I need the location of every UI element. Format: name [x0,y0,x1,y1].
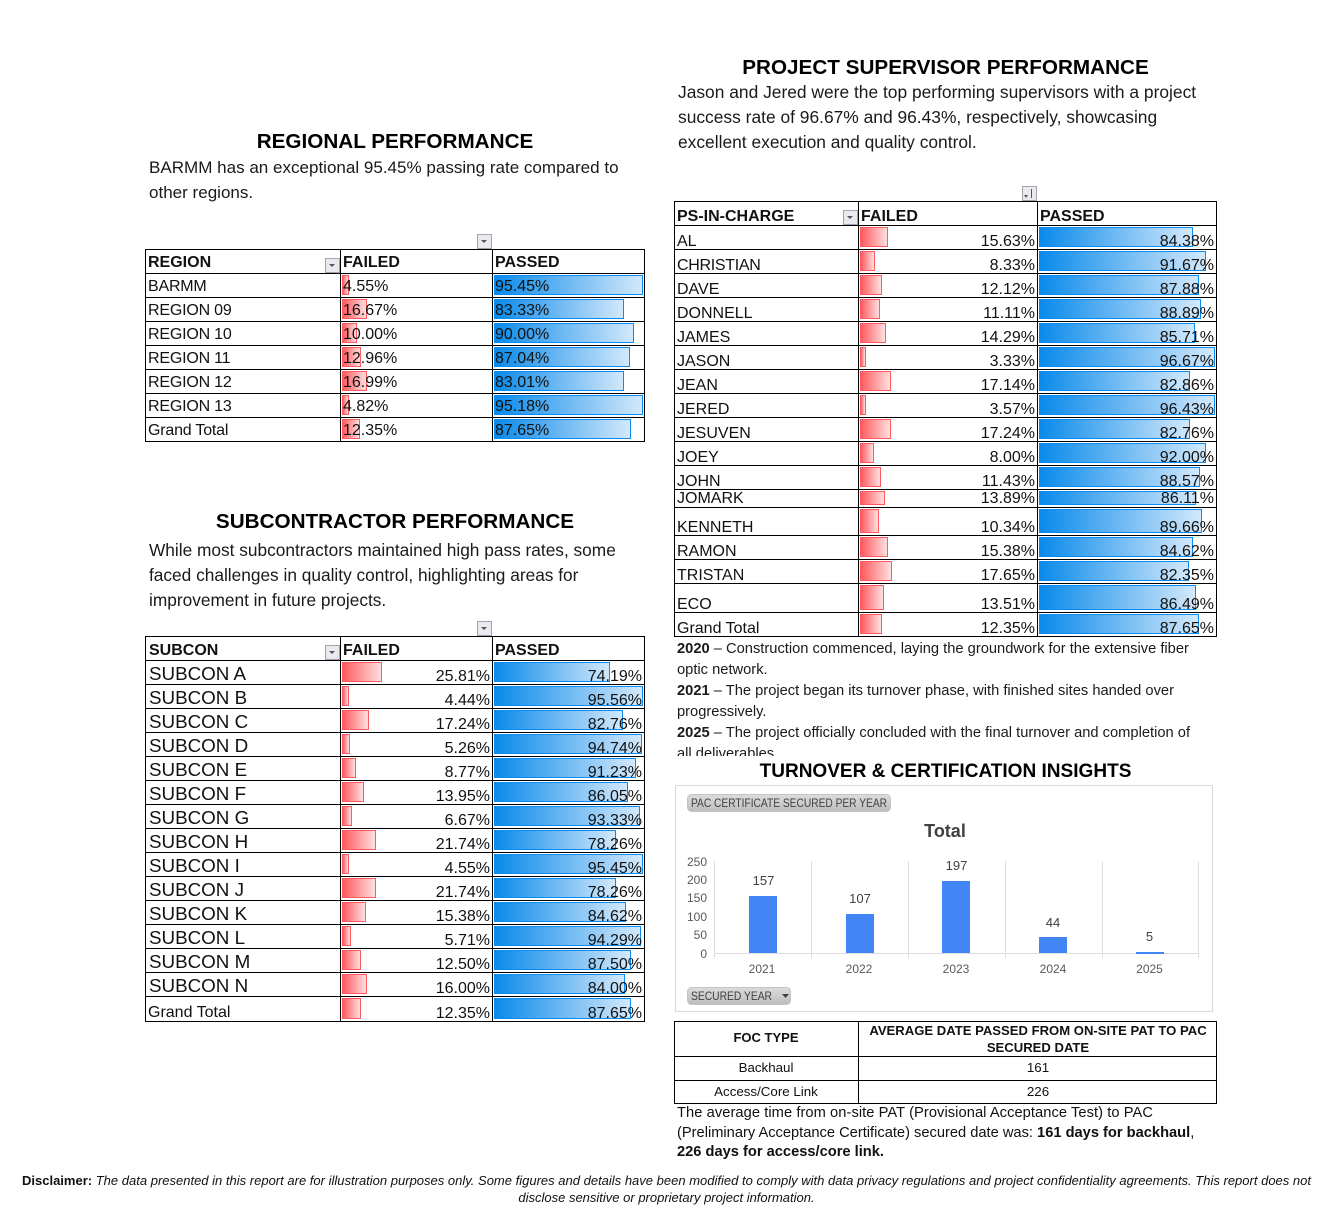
cell: access/core link: Access/Core Link [714,1084,818,1099]
row: Subcon G: SUBCON G [149,807,249,828]
text: project timeline: 2020 – Construction commenced, laying the groundwork for the extensive fiber [677,641,1189,657]
cell: backhaul value: 161 [1027,1060,1049,1075]
row: Donnell [674,297,1217,322]
table: subcontractor performance [145,636,645,1022]
row: Joey: 92.00% [1160,449,1214,466]
row: Subcon B: 4.44% [445,692,490,709]
row: Ramon: 84.62% [1160,543,1214,560]
text: subcontractor summary [149,540,616,610]
cell: backhaul: Backhaul [739,1060,793,1075]
y axis labels: 50 [694,928,707,942]
header: average date [869,1023,1207,1055]
x axis labels: 2022 [846,962,873,976]
row: Subcon E: 91.23% [588,764,642,781]
row: Region 13: 4.82% [343,398,388,415]
row: Subcon A: SUBCON A [149,663,246,684]
row: Donnell: DONNELL [677,305,753,322]
row: Jered: JERED [677,401,729,418]
row: Jesuven: 17.24% [981,425,1035,442]
row: Jered [674,393,1217,418]
row: Subcon C [145,708,645,733]
row: Subcon I: SUBCON I [149,855,240,876]
header row: REGION [148,254,211,271]
header row [145,636,645,661]
y axis labels [687,855,707,961]
text: average time note: The average time from on-site PAT (Provisional Acceptance Test) to PAC [677,1105,1153,1121]
row: Ramon [674,535,1217,560]
row: Dave [674,273,1217,298]
row: Tristan [674,559,1217,584]
row: Dave: 12.12% [981,281,1035,298]
row: Jered: 3.57% [990,401,1035,418]
row: Region 09: 83.33% [495,302,549,319]
y axis labels: 0 [700,947,707,961]
row: Subcon N: SUBCON N [149,975,248,996]
row: Region 11 [145,345,645,370]
row: Subcon D: 5.26% [445,740,490,757]
row: Subcon D [145,732,645,757]
header row: FAILED [343,642,400,659]
table: project supervisor performance [674,201,1217,637]
row: Subcon L: SUBCON L [149,927,245,948]
row: Subcon I: 95.45% [588,860,642,877]
row: Jesuven [674,417,1217,442]
row: Jason: 3.33% [990,353,1035,370]
text: supervisor summary: Jason and Jered were the top performing supervisors with a project [678,82,1196,102]
row: Jason: 96.67% [1160,353,1214,370]
row: James: 14.29% [981,329,1035,346]
row: Subcon M: 87.50% [588,956,642,973]
x axis labels: 2023 [943,962,970,976]
row: Region 11: REGION 11 [148,350,230,367]
row: Grand Total: 12.35% [436,1005,490,1022]
data labels: 44 [1046,915,1060,930]
icon: subcon filter [325,645,340,660]
header: average date: AVERAGE DATE PASSED FROM ON-SITE PAT TO PAC [869,1023,1207,1038]
row: James [674,321,1217,346]
row: Grand Total: 87.65% [1160,620,1214,637]
y axis labels: 100 [687,910,707,924]
icon: supervisor sort [1022,186,1037,201]
row: John [674,465,1217,490]
row: Grand Total: Grand Total [148,1004,230,1021]
row: Region 10: 90.00% [495,326,549,343]
data labels: 107 [849,891,871,906]
y axis labels: 250 [687,855,707,869]
row: BARMM [145,273,645,298]
row: Subcon F [145,780,645,805]
text: supervisor summary: success rate of 96.67% and 96.43%, respectively, showcasing [678,107,1157,127]
text: project timeline: optic network. [677,662,768,678]
text: supervisor summary [678,82,1196,152]
row: Subcon K: 15.38% [436,908,490,925]
row: Subcon A: 74.19% [588,668,642,685]
row: John: 11.43% [982,473,1035,490]
row: BARMM: 95.45% [495,278,549,295]
header: FOC type: FOC TYPE [733,1030,798,1045]
row: Christian [674,249,1217,274]
cell: access/core link value: 226 [1027,1084,1049,1099]
row: Jesuven: 82.76% [1160,425,1214,442]
text: project timeline: progressively. [677,704,767,720]
row: Region 13: 95.18% [495,398,549,415]
row: Subcon E [145,756,645,781]
row: Subcon G: 93.33% [588,812,642,829]
row: AL: 15.63% [981,233,1035,250]
row: Subcon B: 95.56% [588,692,642,709]
icon: regional passed filter [477,234,492,249]
row: Grand Total [674,612,1217,637]
row: Subcon E: SUBCON E [149,759,247,780]
row: Region 10: REGION 10 [148,326,232,343]
row: Region 13 [145,393,645,418]
row: Grand Total [145,996,645,1022]
row: Region 10 [145,321,645,346]
icon: region filter [325,258,340,273]
row: AL [674,225,1217,250]
row: Kenneth [674,507,1217,536]
row: Joey: JOEY [677,449,719,466]
row: Region 09: REGION 09 [148,302,232,319]
row: Subcon F: SUBCON F [149,783,246,804]
x axis labels: 2024 [1040,962,1067,976]
header row: PASSED [1040,208,1105,225]
x axis labels [749,962,1163,976]
row: Subcon H: SUBCON H [149,831,248,852]
row: John: JOHN [677,473,721,490]
text: average time note [677,1105,1194,1160]
chart field button: PAC certificate: PAC CERTIFICATE SECURED PER YEAR [691,796,887,810]
row: Subcon C: SUBCON C [149,711,248,732]
row: Subcon H: 78.26% [588,836,642,853]
row: Jesuven: JESUVEN [677,425,751,442]
text: subcontractor summary: While most subcontractors maintained high pass rates, some [149,540,616,560]
row: Subcon I [145,852,645,877]
row: Christian: CHRISTIAN [677,257,761,274]
row: Subcon J: 21.74% [436,884,490,901]
row: BARMM: BARMM [148,278,207,295]
text: regional summary [149,158,619,202]
row: Region 09 [145,297,645,322]
row: Kenneth: KENNETH [677,519,753,536]
y axis labels: 200 [687,873,707,887]
row: Subcon J: SUBCON J [149,879,244,900]
row: Region 11: 87.04% [495,350,549,367]
row: Jomark: 86.11% [1161,490,1214,507]
row: Subcon K [145,900,645,925]
row: Jean: 17.14% [981,377,1035,394]
text: average time note: (Preliminary Acceptance Certificate) secured date was: 161 days for backhaul, [677,1124,1194,1140]
title: regional performance: REGIONAL PERFORMANCE [257,130,533,153]
text: subcontractor summary: faced challenges in quality control, highlighting areas for [149,565,578,585]
row: Jean [674,369,1217,394]
row: Subcon M [145,948,645,973]
x axis labels: 2025 [1136,962,1163,976]
row: Subcon E: 8.77% [445,764,490,781]
row: Jomark: 13.89% [981,490,1035,507]
row: Region 12: REGION 12 [148,374,232,391]
header row: PASSED [495,254,560,271]
icon: ps filter [843,210,858,225]
row: Donnell: 88.89% [1160,305,1214,322]
icon: subcontractor passed filter [477,621,492,636]
row: Subcon B [145,684,645,709]
row: Tristan: TRISTAN [677,567,744,584]
header row [145,249,645,274]
y axis labels: 150 [687,891,707,905]
row: Subcon N: 84.00% [588,980,642,997]
header row: SUBCON [149,642,218,659]
bars [749,881,1164,954]
row: Subcon D: 94.74% [588,740,642,757]
text: supervisor summary: excellent execution and quality control. [678,132,977,152]
row: Subcon I: 4.55% [445,860,490,877]
row: Jason [674,345,1217,370]
data labels [753,858,1153,944]
header row: PASSED [495,642,560,659]
row: Grand Total: Grand Total [677,620,759,637]
row: Subcon F: 13.95% [436,788,490,805]
row: Region 13: REGION 13 [148,398,232,415]
row: Eco [674,583,1217,613]
row: Subcon N [145,972,645,997]
row: Grand Total: 87.65% [588,1005,642,1022]
row: Region 09: 16.67% [343,302,397,319]
table: regional performance [145,249,645,442]
row: Dave: 87.88% [1160,281,1214,298]
row: Subcon G [145,804,645,829]
row: Subcon C: 82.76% [588,716,642,733]
row: Subcon H [145,828,645,853]
row: Jered: 96.43% [1160,401,1214,418]
row: Subcon B: SUBCON B [149,687,247,708]
text: regional summary: BARMM has an exceptional 95.45% passing rate compared to [149,158,619,177]
row: John: 88.57% [1160,473,1214,490]
header: average date: SECURED DATE [987,1040,1089,1055]
row: AL: 84.38% [1160,233,1214,250]
chart title: Total [924,821,966,841]
row: Jean: JEAN [677,377,718,394]
row: Grand Total: Grand Total [148,422,228,439]
text: disclaimer [22,1173,1312,1205]
row: Subcon K: SUBCON K [149,903,247,924]
header row: FAILED [861,208,918,225]
x axis labels: 2021 [749,962,776,976]
row: Eco: 86.49% [1160,596,1214,613]
row: Grand Total: 12.35% [981,620,1035,637]
row: Region 12: 16.99% [343,374,397,391]
row: Subcon M: SUBCON M [149,951,250,972]
row: Christian: 91.67% [1160,257,1214,274]
row: Subcon L [145,924,645,949]
header row [674,201,1217,226]
title: subcontractor performance: SUBCONTRACTOR PERFORMANCE [216,510,574,533]
row: Ramon: 15.38% [981,543,1035,560]
row: Subcon K: 84.62% [588,908,642,925]
row: Joey: 8.00% [990,449,1035,466]
row: Subcon L: 5.71% [445,932,490,949]
text: project timeline: 2025 – The project officially concluded with the final turnover and completion of [677,725,1190,741]
row: Subcon D: SUBCON D [149,735,248,756]
text: disclaimer: disclose sensitive or proprietary project information. [518,1190,815,1205]
row: Subcon N: 16.00% [436,980,490,997]
row: Region 11: 12.96% [343,350,397,367]
row: Kenneth: 89.66% [1160,519,1214,536]
chart field button: secured year: SECURED YEAR [691,989,772,1003]
data labels: 197 [946,858,967,873]
row: Grand Total: 87.65% [495,422,549,439]
row: Jomark [674,489,1217,508]
row: Subcon F: 86.05% [588,788,642,805]
row: BARMM: 4.55% [343,278,388,295]
row: James: JAMES [677,329,730,346]
header row: FAILED [343,254,400,271]
text: average time note: 226 days for access/core link. [677,1144,884,1160]
row: Region 12 [145,369,645,394]
row: Jean: 82.86% [1160,377,1214,394]
text: disclaimer: Disclaimer: The data presented in this report are for illustration purposes only. Some figures and details have been modified to comply with data privacy regulations and project confidentiality agreements. This report does not [22,1173,1311,1188]
row: Jomark: JOMARK [677,490,744,507]
row: Eco: ECO [677,596,712,613]
row: Grand Total [145,417,645,442]
row: Christian: 8.33% [990,257,1035,274]
row: Dave: DAVE [677,281,719,298]
row: Jason: JASON [677,353,730,370]
row: Region 10: 10.00% [343,326,397,343]
row: James: 85.71% [1160,329,1214,346]
row: Donnell: 11.11% [983,305,1035,322]
title: turnover and certification insights: TURNOVER & CERTIFICATION INSIGHTS [760,761,1131,782]
table: FOC type average dates [674,1021,1217,1104]
title: project supervisor performance: PROJECT SUPERVISOR PERFORMANCE [742,56,1149,79]
row: Subcon A [145,660,645,685]
row: Region 12: 83.01% [495,374,549,391]
row: Subcon L: 94.29% [588,932,642,949]
text: project timeline: 2021 – The project began its turnover phase, with finished sites handed over [677,683,1174,699]
row: Joey [674,441,1217,466]
row: Ramon: RAMON [677,543,737,560]
row: Subcon C: 17.24% [436,716,490,733]
data labels: 157 [753,873,774,888]
data labels: 5 [1146,929,1153,944]
text: regional summary: other regions. [149,183,253,202]
row: Tristan: 82.35% [1160,567,1214,584]
text: project timeline [677,641,1190,756]
row: Subcon G: 6.67% [445,812,490,829]
row: AL: AL [677,233,697,250]
row: Subcon M: 12.50% [436,956,490,973]
row: Subcon J: 78.26% [588,884,642,901]
row: Tristan: 17.65% [981,567,1035,584]
row: Subcon H: 21.74% [436,836,490,853]
row: Kenneth: 10.34% [981,519,1035,536]
row: Eco: 13.51% [981,596,1035,613]
row: Subcon A: 25.81% [436,668,490,685]
row: Subcon J [145,876,645,901]
row: Grand Total: 12.35% [343,422,397,439]
header row: PS-IN-CHARGE [677,208,794,225]
text: subcontractor summary: improvement in future projects. [149,590,386,610]
chart: PAC certificates secured per year [675,785,1213,1012]
